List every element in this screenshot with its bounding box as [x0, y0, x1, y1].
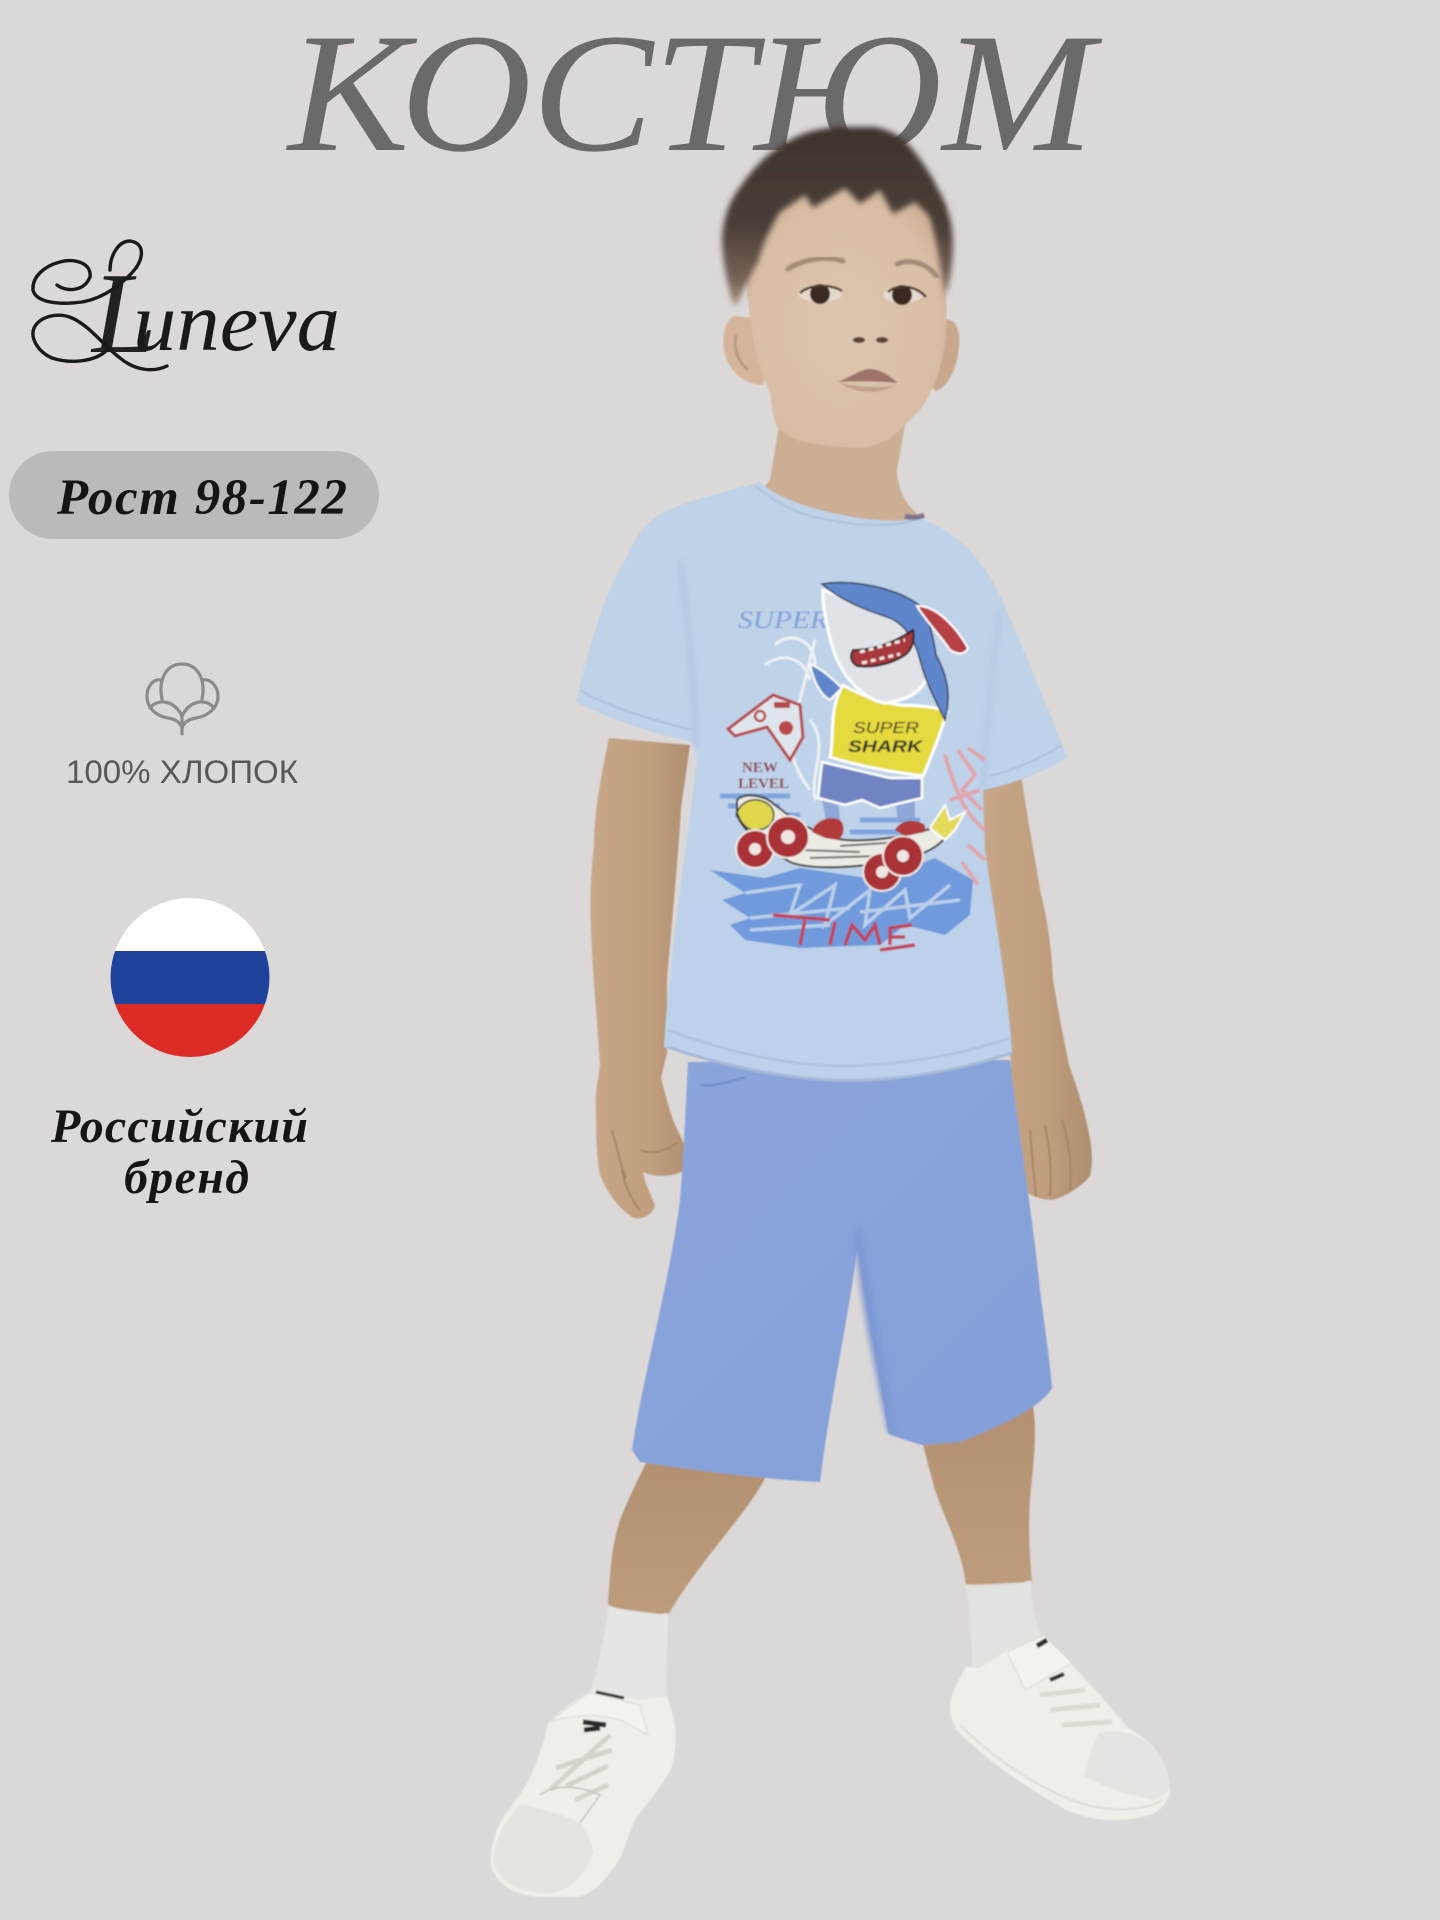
left arm [590, 738, 692, 1218]
brand label: бренд [124, 1151, 249, 1204]
hair [722, 127, 953, 307]
print: new level: LEVEL [738, 776, 789, 792]
print: palm tree [765, 638, 819, 800]
left ear [723, 316, 772, 385]
eyes [798, 284, 926, 305]
right leg [922, 1390, 1035, 1585]
print: new level: NEW [742, 760, 778, 776]
right sock [966, 1580, 1042, 1675]
right arm [975, 775, 1092, 1200]
print: pink graffiti [945, 748, 985, 885]
print: shark shirt: SUPER [853, 720, 920, 737]
brand label [50, 1100, 308, 1204]
face [742, 179, 947, 448]
neck [762, 420, 922, 522]
icon: russian flag [110, 898, 270, 1058]
height badge: Рост 98-122 [56, 470, 347, 526]
print: shark shirt: SHARK [848, 737, 924, 756]
print: blue stripes [720, 796, 925, 832]
left sock [590, 1605, 668, 1705]
print: graffiti lettering [710, 858, 973, 948]
t-shirt [576, 482, 1067, 1080]
right shoe [950, 1635, 1170, 1820]
boy figure [491, 127, 1170, 1897]
logo: Luneva: L [90, 250, 157, 378]
height badge [9, 451, 379, 539]
head [722, 127, 959, 448]
icon: cotton [147, 664, 218, 734]
print: shark shirt [830, 685, 947, 776]
eyebrows [788, 258, 937, 277]
print: wheels [736, 816, 923, 891]
cotton label: 100% ХЛОПОК [66, 754, 298, 790]
print: super label: SUPER [738, 607, 828, 634]
t-shirt shark print [710, 582, 985, 950]
print: skateboard [737, 795, 965, 867]
left ear detail [735, 335, 748, 370]
logo: Luneva: uneva [133, 276, 340, 369]
print: shark head [810, 582, 968, 720]
print: new level [738, 760, 789, 792]
brand label: Российский [50, 1100, 308, 1153]
left shoe [491, 1690, 676, 1897]
logo: Luneva [33, 241, 340, 378]
print: shark shorts [818, 762, 922, 808]
shorts [632, 1060, 1052, 1482]
nose [853, 337, 888, 343]
print: shark legs and shoes [812, 800, 925, 840]
title: КОСТЮМ [286, 0, 1103, 187]
right ear [925, 319, 959, 391]
print: game controller [728, 695, 803, 760]
mouth [837, 369, 898, 392]
print: red graffiti word [773, 915, 915, 950]
left leg [608, 1455, 765, 1615]
